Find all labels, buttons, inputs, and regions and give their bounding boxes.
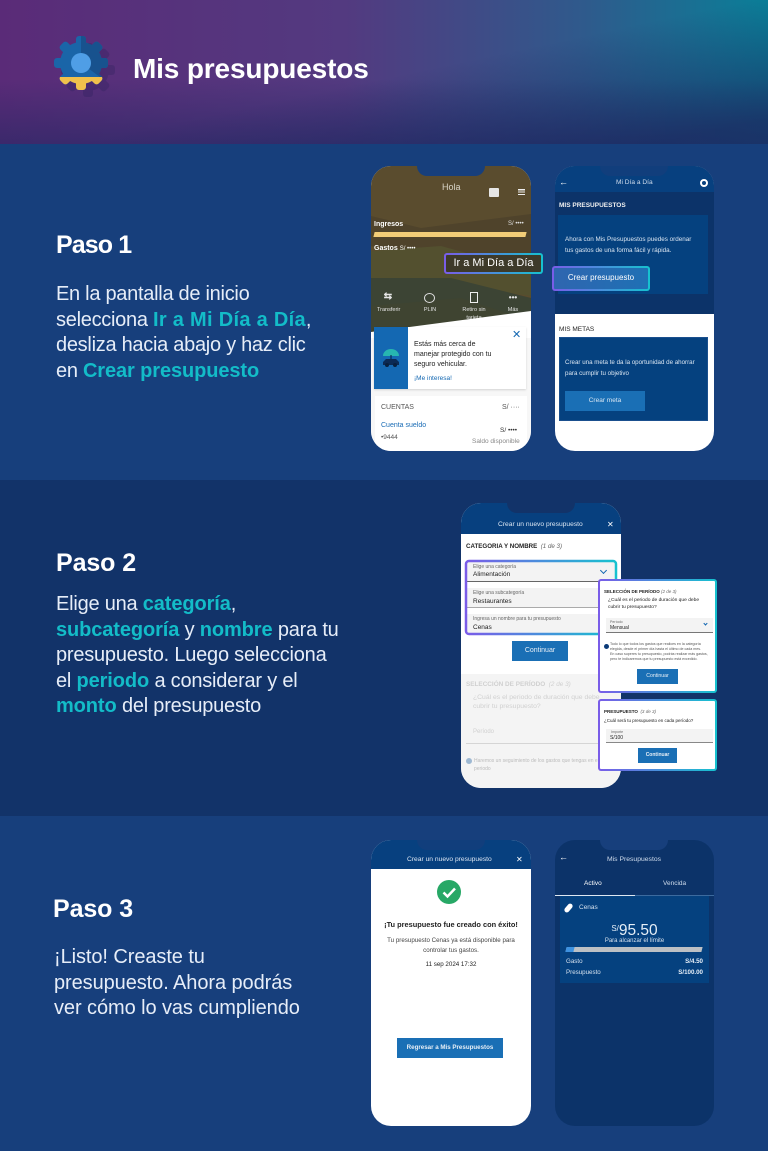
screen title: Crear un nuevo presupuesto (407, 856, 492, 863)
field value: Alimentación (473, 571, 510, 578)
action: transferir: Transferir (377, 307, 400, 313)
text: step 2 description (56, 593, 339, 717)
action: mas: ••• (509, 293, 517, 302)
active tab indicator (555, 895, 635, 896)
tab: activo: Activo (584, 880, 602, 887)
info text: Todo lo que todos los gastos que realices en la categoría (610, 642, 701, 646)
card text: seguro vehicular. (414, 361, 467, 368)
screen title: Mi Día a Día (616, 179, 653, 186)
card link: ¡Me interesa! (414, 375, 452, 382)
back arrow: ← (559, 177, 568, 187)
action: plin (424, 293, 436, 313)
budget card (560, 896, 709, 983)
insurance card (374, 327, 526, 389)
panel: step 3 (0, 816, 768, 1151)
button (638, 748, 677, 763)
callout title: SELECCIÓN DE PERÍODO (2 de 3) (604, 589, 677, 594)
gastos row: Gastos S/ •••• (374, 245, 415, 252)
amount field (606, 729, 713, 743)
text: step 2 description: el periodo a considerar y el (56, 670, 297, 692)
header banner (0, 0, 768, 144)
notch (600, 840, 668, 850)
action: plin: PLIN (424, 307, 436, 313)
action: retiro (462, 292, 486, 321)
button (637, 669, 678, 684)
icon: success check (437, 880, 461, 904)
chevron (600, 567, 607, 574)
field value: Cenas (473, 624, 492, 631)
field: categoria (467, 561, 615, 582)
highlight: category fields (464, 560, 618, 636)
button (565, 391, 645, 411)
disabled info: periodo (474, 766, 491, 772)
active tab line (555, 895, 714, 896)
progress fill (565, 947, 575, 952)
disabled question (473, 694, 600, 710)
ingresos bar (373, 232, 527, 237)
highlight: ir a mi dia a dia: Ir a Mi Día a Día (453, 257, 534, 269)
disabled line (466, 743, 616, 744)
info icon (604, 644, 609, 649)
callout: presupuesto amount (598, 699, 717, 771)
notch (417, 166, 485, 176)
disabled question: cubrir tu presupuesto? (473, 702, 541, 710)
field label: Período (610, 620, 623, 624)
heading: paso 3: Paso 3 (53, 895, 133, 923)
quick actions (377, 291, 518, 321)
close: ✕ (516, 855, 523, 864)
field value: Restaurantes (473, 598, 512, 605)
field label: Importe (611, 730, 623, 734)
field value: Mensual (610, 625, 629, 631)
card text: manejar protegido con tu (414, 351, 491, 358)
info text: elegida, desde el primer día hasta el último de cada mes. (610, 647, 701, 651)
highlight: crear presupuesto: Crear presupuesto (568, 273, 634, 282)
action: transferir: ⇆ (384, 291, 392, 302)
action: mas: Más (508, 307, 518, 313)
section title: MIS PRESUPUESTOS (559, 202, 626, 209)
presupuesto label: Presupuesto (566, 969, 601, 976)
card text (565, 359, 695, 376)
card text: para cumplir tu objetivo (565, 370, 629, 376)
screen title: Mis Presupuestos (607, 856, 661, 863)
action: retiro: tarjeta (466, 315, 482, 321)
tab: vencida: Vencida (663, 880, 686, 887)
callout: periodo selection (598, 579, 717, 693)
success text: controlar tus gastos. (423, 947, 479, 954)
disabled section (461, 674, 621, 788)
info text: pero te indicaremos que tu presupuesto está excedido. (610, 657, 698, 661)
cuentas amount: S/ ···· (502, 404, 520, 411)
callout question: cubrir tu presupuesto? (608, 604, 657, 610)
button: Regresar a Mis Presupuestos (407, 1044, 493, 1051)
presupuesto value: S/100.00 (678, 969, 703, 976)
close: ✕ (607, 520, 614, 529)
phone: home screen (371, 166, 531, 451)
field: subcategoria (467, 588, 615, 608)
card text (565, 236, 692, 254)
text: step 3 description: ver cómo lo vas cumpliendo (54, 997, 300, 1019)
text: step 2 description: Elige una categoría, (56, 593, 236, 615)
text: step 1 description: desliza hacia abajo y haz clic (56, 334, 306, 356)
phone: my budgets (555, 840, 714, 1126)
card text: Crear una meta te da la oportunidad de ahorrar (565, 359, 695, 366)
action: transferir (377, 291, 400, 313)
text: step 2 description: monto del presupuesto (56, 695, 261, 717)
cuentas title: CUENTAS (381, 404, 414, 411)
button: Continuar (646, 673, 669, 679)
card text: Ahora con Mis Presupuestos puedes ordenar (565, 236, 691, 243)
callout question: ¿Cuál será tu presupuesto en cada período? (604, 718, 693, 723)
category name: Cenas (579, 904, 598, 911)
action: mas (508, 293, 518, 313)
gasto value: S/4.50 (685, 958, 703, 965)
button (397, 1038, 503, 1058)
ingresos row: Ingresos (374, 221, 403, 228)
date: 11 sep 2024 17:32 (426, 961, 476, 968)
top dark section (555, 166, 714, 314)
chevron (703, 621, 708, 626)
disabled question: ¿Cuál es el periodo de duración que debe (473, 694, 600, 701)
white diagonal (371, 311, 531, 338)
field label: Elige una categoría (473, 564, 516, 570)
text: step 1 description (56, 283, 311, 382)
icon: umbrella car (383, 349, 399, 367)
accounts card (375, 396, 527, 451)
icon: gear (54, 36, 115, 97)
field label: Elige una subcategoría (473, 590, 524, 596)
balance: S/ •••• (500, 427, 517, 434)
remaining label: Para alcanzar el límite (605, 938, 664, 944)
notch (600, 166, 668, 176)
icon: settings (700, 179, 708, 187)
text: step 3 description: presupuesto. Ahora podrás (54, 972, 292, 994)
panel: step 1 (0, 144, 768, 480)
field label: Ingresa un nombre para tu presupuesto (473, 616, 561, 622)
success heading: ¡Tu presupuesto fue creado con éxito! (384, 920, 518, 929)
highlight: crear presupuesto (552, 266, 650, 291)
goals card (559, 337, 708, 421)
field: nombre (467, 614, 615, 634)
card text (414, 340, 491, 368)
greeting: Hola (442, 182, 461, 192)
success text: Tu presupuesto Cenas ya está disponible para (387, 937, 515, 944)
text: step 2 description: subcategoría y nombre para tu (56, 619, 339, 641)
notch (507, 503, 575, 513)
text: step 1 description: en Crear presupuesto (56, 360, 259, 382)
callout field (606, 618, 713, 633)
form title: CATEGORIA Y NOMBRE (1 de 3) (466, 543, 562, 550)
card text: Estás más cerca de (414, 341, 475, 348)
card text: tus gastos de una forma fácil y rápida. (565, 246, 671, 254)
callout question (608, 598, 699, 610)
card blue band (374, 327, 408, 389)
success text (387, 937, 515, 954)
back arrow: ← (559, 852, 568, 862)
continue button (512, 641, 568, 661)
phone: mi dia a dia (555, 166, 714, 451)
progress bar (565, 947, 703, 952)
lower area (371, 338, 531, 451)
info icon (466, 758, 472, 764)
icon: menu (518, 189, 525, 195)
home photo background (371, 166, 531, 332)
icon: cutlery (563, 903, 574, 913)
highlight: ir a mi dia a dia (444, 253, 543, 274)
disabled title: SELECCIÓN DE PERÍODO (2 de 3) (466, 681, 571, 688)
text: step 2 description: presupuesto. Luego selecciona (56, 644, 326, 666)
disabled info (474, 758, 599, 772)
phone: success screen (371, 840, 531, 1126)
text: step 3 description: ¡Listo! Creaste tu (54, 946, 205, 968)
info text (610, 642, 708, 661)
remaining amount: S/95.50 (611, 922, 658, 939)
button: Crear meta (589, 397, 621, 404)
text: step 1 description: En la pantalla de inicio (56, 283, 249, 305)
title: Mis presupuestos (133, 53, 369, 84)
saldo label: Saldo disponible (472, 438, 520, 445)
callout question: ¿Cuál es el periodo de duración que debe (608, 598, 699, 603)
cuenta sueldo: Cuenta sueldo (381, 422, 426, 429)
icon: chat (489, 188, 499, 197)
section title: MIS METAS (559, 326, 594, 333)
ingresos amount: S/ •••• (508, 221, 524, 227)
app bar (461, 503, 621, 534)
app bar (371, 840, 531, 869)
button: Continuar (646, 752, 669, 758)
phone: category form (461, 503, 621, 788)
icon: close: ✕ (512, 329, 521, 341)
heading: paso 1: Paso 1 (56, 231, 131, 259)
disabled info: Haremos un seguimiento de los gastos que tengas en el (474, 758, 599, 764)
app bar (555, 166, 714, 192)
panel: step 2 (0, 480, 768, 816)
heading: paso 2: Paso 2 (56, 549, 136, 577)
text: step 1 description: selecciona Ir a Mi Día a Día, (56, 309, 311, 331)
gasto label: Gasto (566, 958, 583, 965)
field value: S/100 (610, 735, 623, 741)
continue button: Continuar (525, 647, 555, 654)
callout title: PRESUPUESTO (3 de 3) (604, 709, 656, 714)
budget card (558, 215, 708, 294)
notch (417, 840, 485, 850)
action: retiro: Retiro sin (462, 307, 486, 313)
screen title: Crear un nuevo presupuesto (498, 521, 583, 528)
cuenta number: •9444 (381, 434, 398, 441)
info text: En caso superes tu presupuesto, podrás realizar más gastos, (610, 652, 708, 656)
disabled field: Período (473, 729, 494, 735)
text: step 3 description (54, 946, 300, 1019)
